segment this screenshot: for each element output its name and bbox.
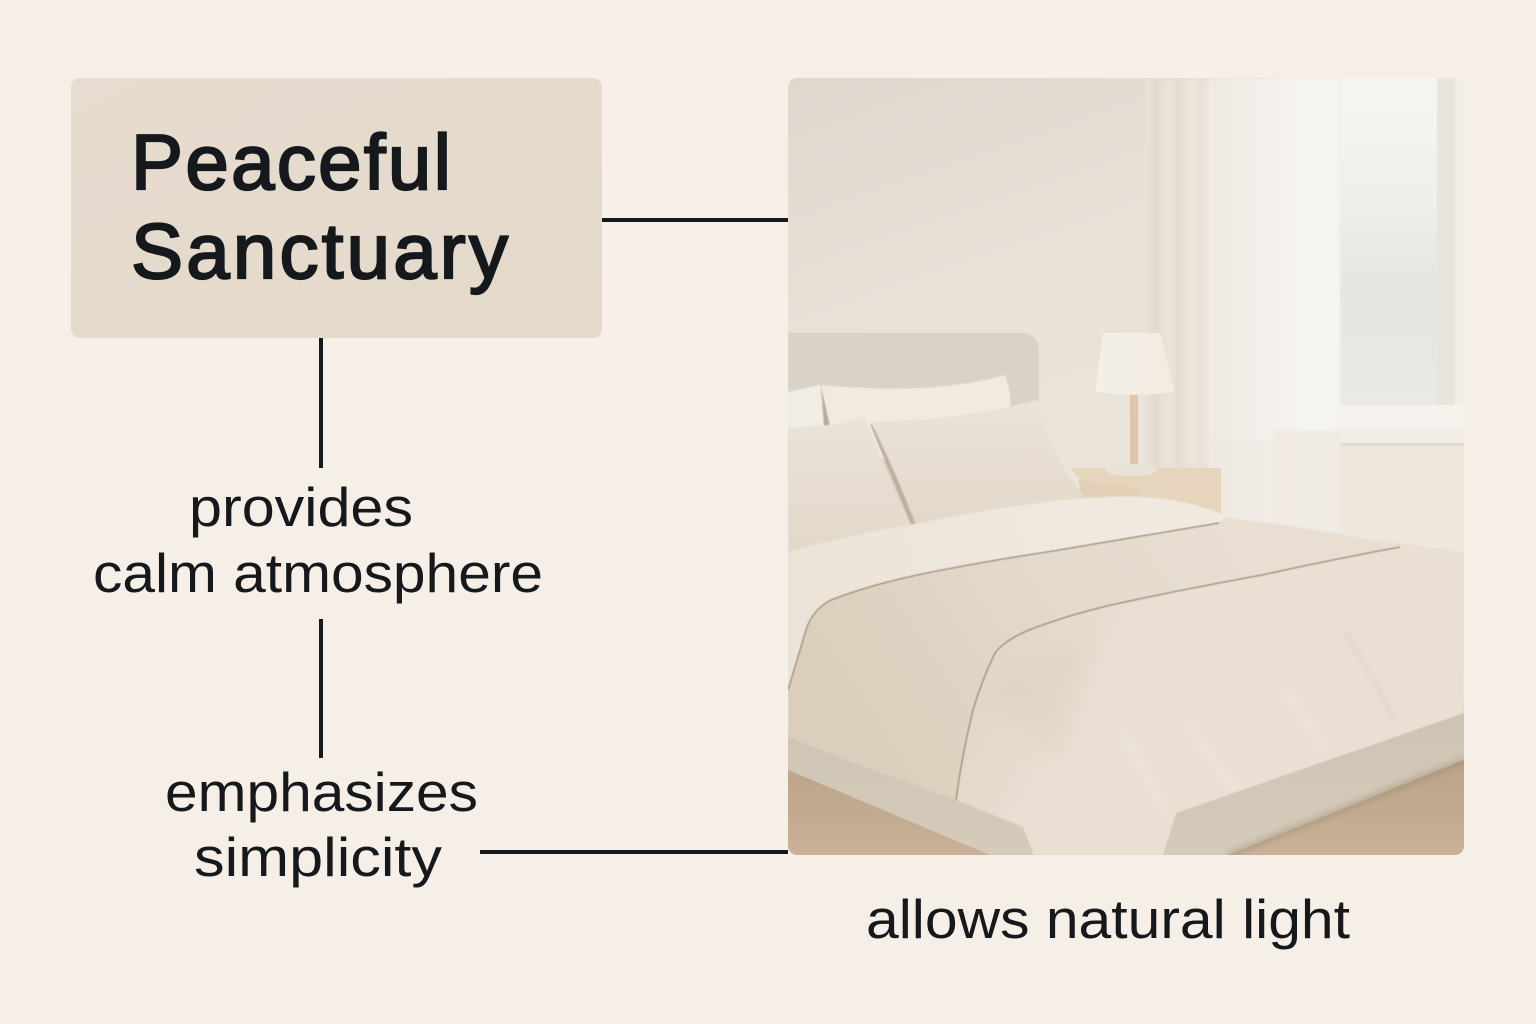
text: emphasizes simplicity: simplicity (194, 826, 443, 888)
text: emphasizes simplicity (165, 761, 478, 888)
title: Peaceful (131, 118, 451, 206)
photo: bedroom (788, 78, 1464, 860)
turned-down fold (788, 496, 1228, 690)
left front pillow (788, 417, 911, 552)
seams (788, 523, 1219, 690)
text: provides calm atmosphere (93, 476, 543, 604)
connector: title box to photo (602, 218, 788, 222)
body (956, 518, 1464, 855)
title: Sanctuary (131, 207, 508, 295)
pillows (788, 375, 1085, 552)
wall (788, 78, 1340, 492)
corner shading (985, 640, 1090, 760)
nightstand (1071, 468, 1221, 514)
back pillows (788, 385, 824, 428)
shadow between front pillows (870, 424, 916, 525)
headboard (788, 333, 1039, 520)
panel: title box (71, 78, 602, 338)
text: allows natural light: allows natural light (866, 888, 1350, 950)
lamp (1095, 333, 1175, 476)
title (131, 118, 508, 295)
middle band (788, 525, 1338, 799)
duvet (788, 496, 1464, 855)
window (1340, 78, 1464, 446)
bed shadow on floor (1228, 760, 1464, 855)
text: provides calm atmosphere: provides (189, 476, 413, 538)
right front pillow (871, 400, 1085, 525)
text: provides calm atmosphere: calm atmosphere (93, 542, 543, 604)
connector: title box to provides label (319, 338, 323, 468)
connector: provides label to emphasizes label (319, 619, 323, 758)
floor (788, 760, 1464, 855)
connector: emphasizes label to photo (480, 850, 788, 854)
bed base (788, 700, 1464, 855)
wrinkles (1125, 630, 1395, 810)
text: emphasizes simplicity: emphasizes (165, 761, 478, 823)
curtains (1145, 78, 1340, 558)
